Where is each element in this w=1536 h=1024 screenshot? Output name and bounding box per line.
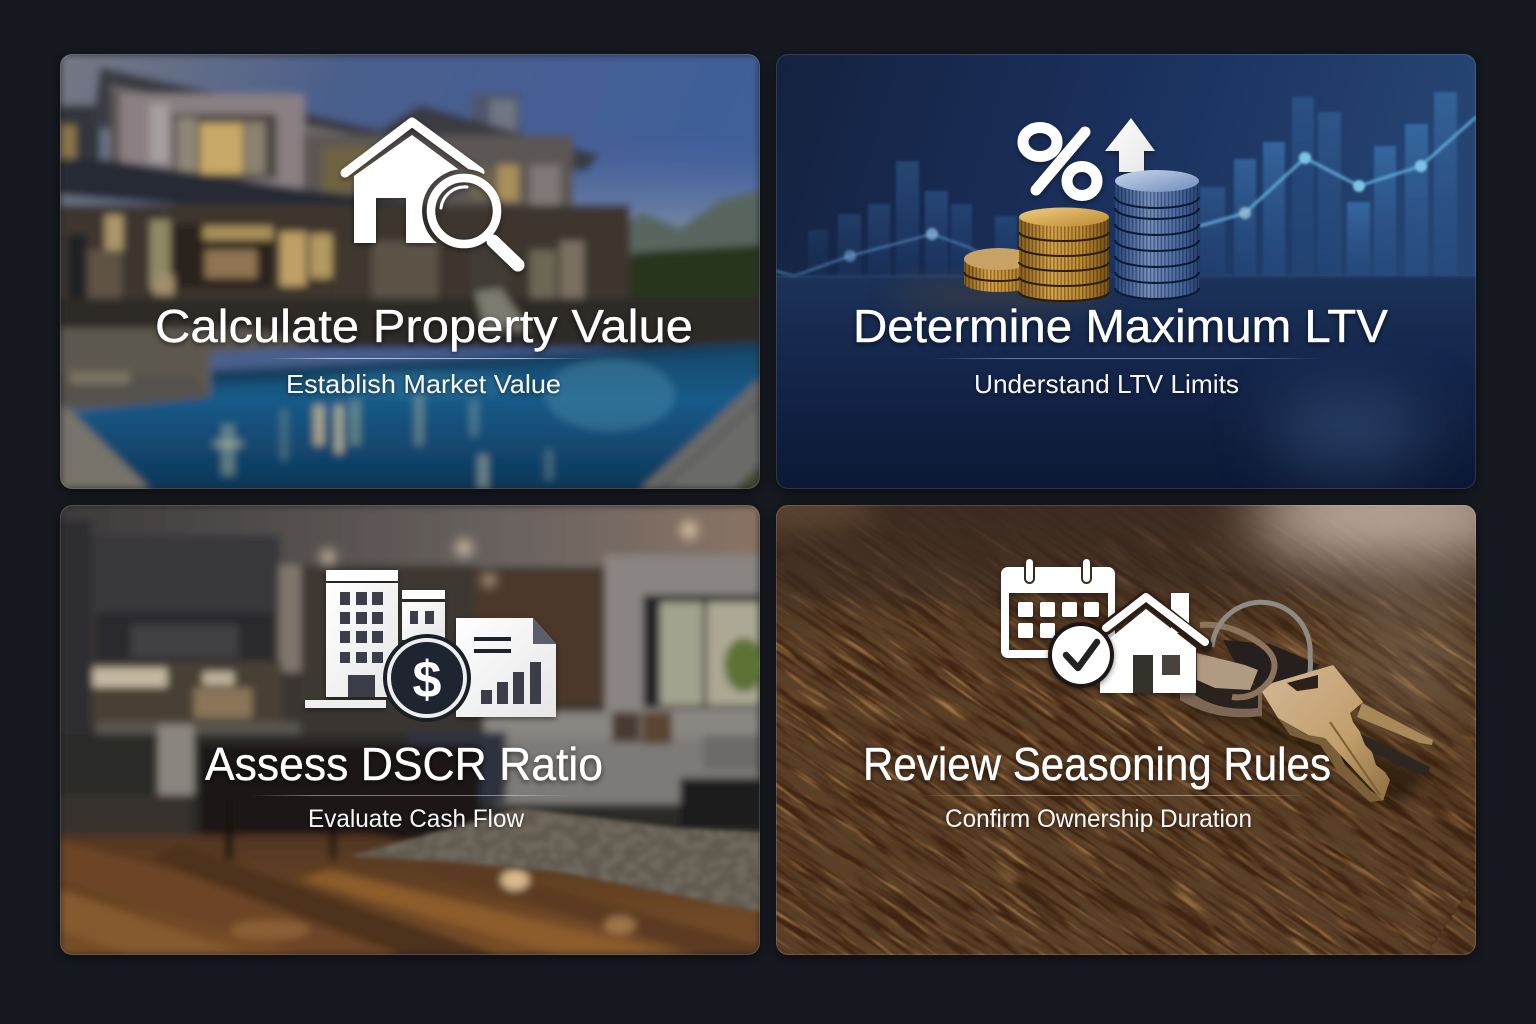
panel: assess dscr ratio — [60, 505, 764, 955]
subheading: understand ltv limits: Understand LTV Limits — [974, 369, 1239, 399]
icon: house with magnifying glass — [345, 122, 518, 265]
icon: small gold coin stack — [963, 248, 1019, 292]
icon: house — [1100, 593, 1205, 693]
subheading: establish market value: Establish Market Value — [286, 369, 561, 399]
icon: dollar coin — [383, 634, 471, 722]
illustration: keys on ring — [1180, 602, 1433, 810]
heading: determine maximum ltv: Determine Maximum LTV — [853, 300, 1388, 352]
icon: up arrow — [1105, 118, 1155, 172]
icon: dollar coin: $ — [413, 651, 442, 709]
panel: review seasoning rules — [776, 505, 1476, 958]
heading: assess dscr ratio: Assess DSCR Ratio — [205, 738, 603, 790]
icon: calendar — [1001, 558, 1115, 658]
heading: review seasoning rules: Review Seasoning Rules — [863, 738, 1331, 790]
photo: blurred living room interior — [60, 505, 764, 955]
photo: blurred house with pool — [60, 54, 760, 489]
photo: financial chart backdrop — [776, 54, 1476, 489]
heading: calculate property value: Calculate Property Value — [155, 300, 693, 352]
icon: percent sign — [1023, 128, 1097, 196]
photo: wood table surface — [776, 505, 1476, 955]
subheading: confirm ownership duration: Confirm Ownership Duration — [945, 805, 1252, 833]
icon: financial document with bars — [456, 618, 556, 717]
icon: apartment building — [305, 570, 445, 708]
rug — [350, 808, 760, 912]
icon: check badge — [1048, 622, 1114, 688]
subheading: evaluate cash flow: Evaluate Cash Flow — [308, 805, 525, 833]
panel: calculate property value — [60, 54, 760, 489]
icon: blue coin stack — [1115, 170, 1199, 299]
panel: determine maximum ltv — [776, 54, 1476, 489]
icon: gold coin stack — [1019, 208, 1109, 301]
